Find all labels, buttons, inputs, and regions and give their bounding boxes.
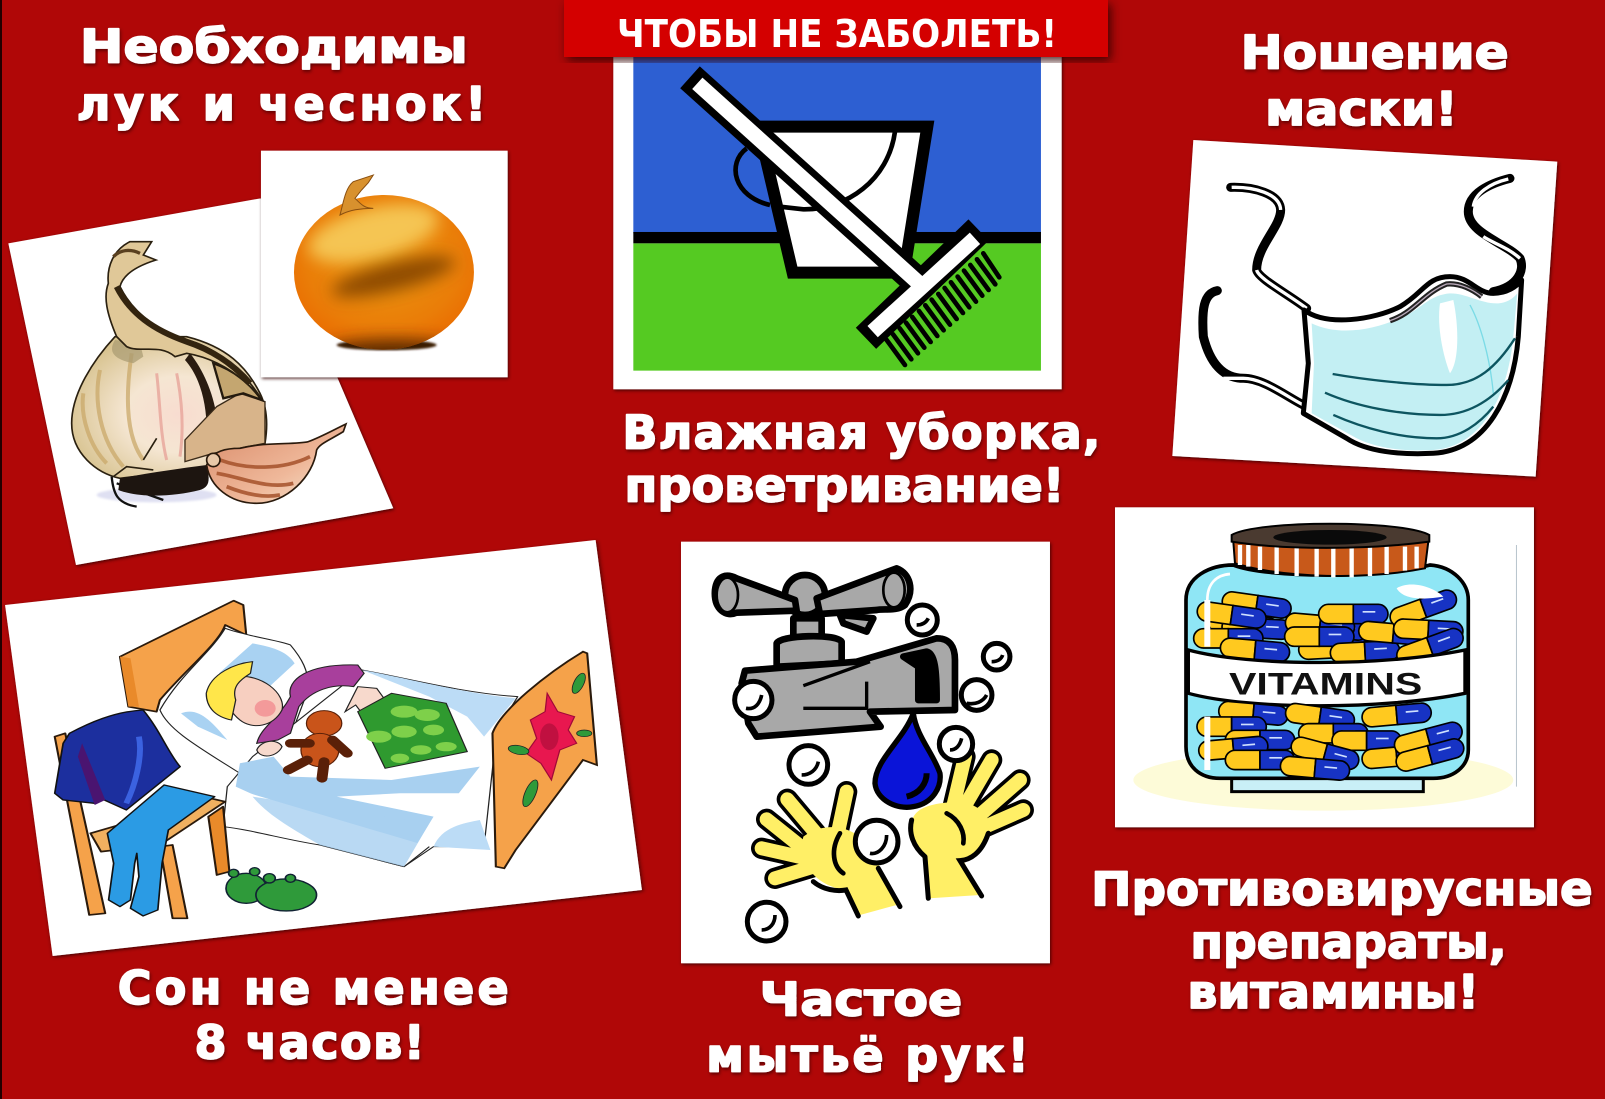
panel: hand washing: [681, 542, 1050, 963]
icon: jar lid: [1232, 524, 1429, 577]
icon: faucet: [715, 568, 955, 737]
icon: jar shadow: [1133, 749, 1513, 811]
icon: garlic clove: [207, 424, 346, 503]
caption: antivirals and vitamins: витамины!: [1187, 965, 1479, 1019]
icon: bed: [120, 601, 518, 867]
icon: teddy bear: [288, 711, 347, 778]
heading: mask: Ношение: [1241, 26, 1509, 80]
icon: water drop: [875, 713, 940, 807]
caption: antivirals and vitamins: Противовирусные: [1091, 862, 1593, 916]
caption: antivirals and vitamins: [1091, 862, 1593, 1019]
panel: vitamins: [1115, 507, 1534, 827]
panel: sleep: [5, 540, 642, 956]
icon: onion: [294, 175, 474, 367]
icon: green slippers: [226, 868, 317, 911]
title banner: ЧТОБЫ НЕ ЗАБОЛЕТЬ!: [617, 12, 1057, 56]
panel: face mask: [1172, 140, 1557, 477]
capsule group: upper: [1194, 587, 1466, 668]
icon: soap bubbles: [735, 605, 1010, 941]
icon: sleeping boy: [206, 662, 385, 756]
heading: onion and garlic: [77, 19, 486, 131]
icon: right hand: [911, 757, 1023, 898]
icon: chair with clothes: [55, 710, 229, 918]
icon: left hand: [762, 792, 900, 916]
panel: garlic: [8, 198, 393, 565]
caption: wet cleaning: проветривание!: [624, 459, 1065, 513]
icon: rake: [690, 77, 999, 365]
caption: wet cleaning: [622, 405, 1100, 513]
title banner: [564, 0, 1108, 57]
caption: antivirals and vitamins: препараты,: [1190, 915, 1507, 969]
panel: onion: [261, 151, 508, 377]
icon: surgical mask: [1203, 178, 1522, 454]
caption: hand washing: Частое: [760, 972, 962, 1026]
caption: hand washing: мытьё рук!: [706, 1029, 1029, 1083]
capsule group: lower: [1197, 701, 1466, 781]
icon: blue and green backdrop: [633, 57, 1041, 371]
caption: wet cleaning: Влажная уборка,: [622, 405, 1100, 459]
icon: vitamins jar: [1186, 565, 1468, 792]
caption: sleep: Сон не менее: [118, 961, 509, 1015]
heading: mask: [1241, 26, 1509, 136]
icon: garlic bulb: [72, 242, 267, 507]
icon: green quilt: [358, 693, 467, 768]
icon: bucket: [736, 127, 927, 273]
heading: onion and garlic: Необходимы: [80, 19, 468, 73]
caption: sleep: [118, 961, 509, 1069]
caption: sleep: 8 часов!: [194, 1015, 425, 1069]
icon: footboard with flower: [492, 652, 597, 868]
label text: VITAMINS: [1229, 666, 1422, 701]
caption: hand washing: [706, 972, 1029, 1083]
panel: wet cleaning: [613, 50, 1062, 389]
heading: onion and garlic: лук и чеснок!: [77, 77, 486, 131]
heading: mask: маски!: [1265, 82, 1458, 136]
